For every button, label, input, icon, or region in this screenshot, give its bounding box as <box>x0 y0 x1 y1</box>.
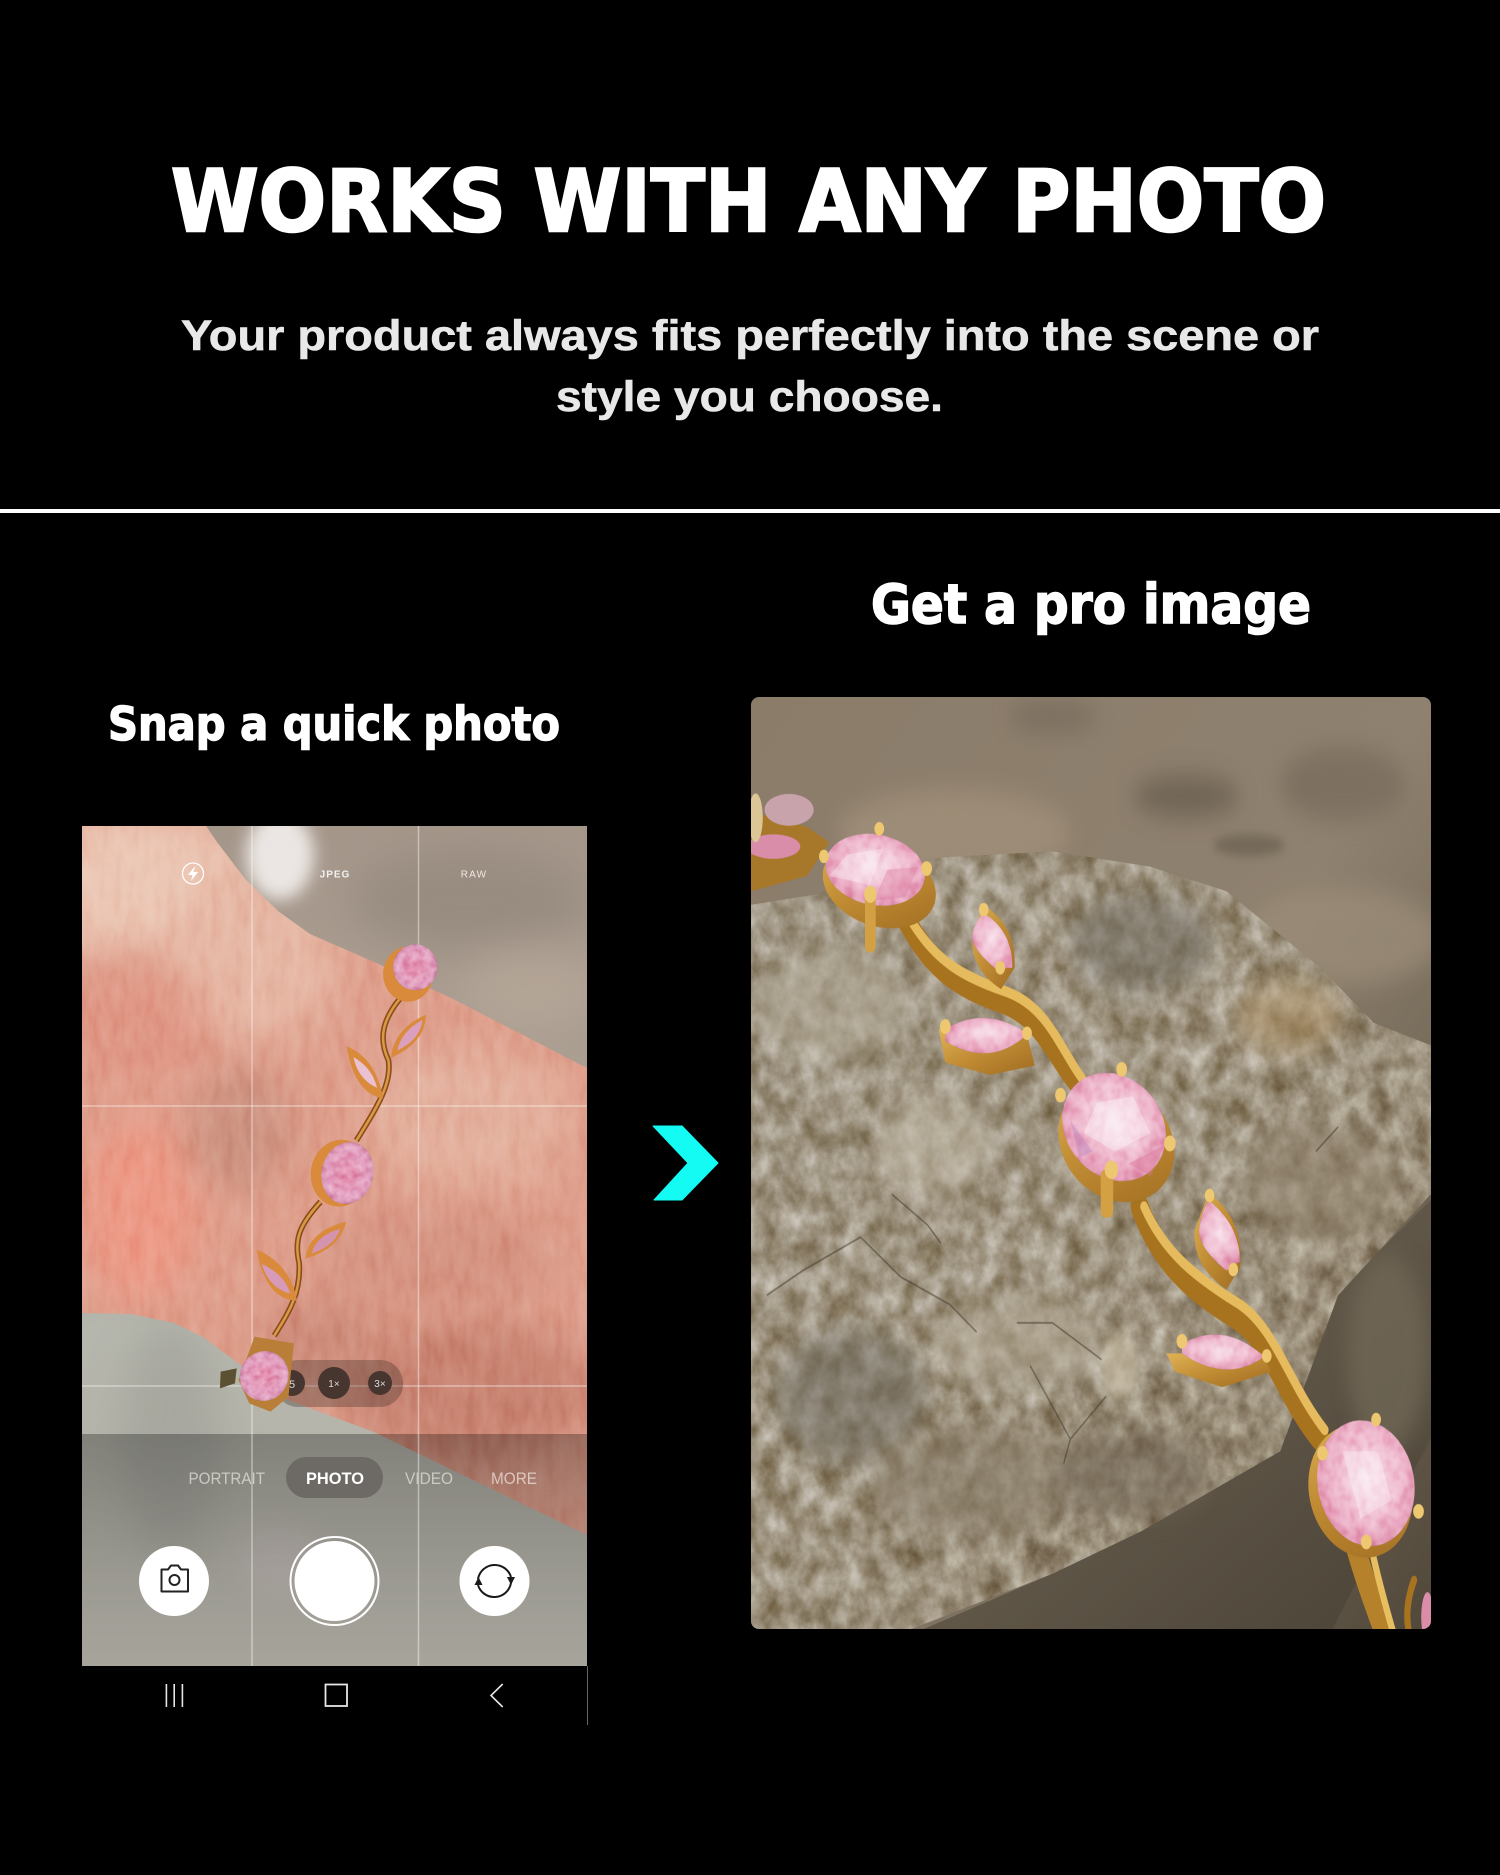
mode labels: MORE <box>491 1469 537 1488</box>
rock side face <box>910 1194 1436 1635</box>
rock cracks <box>767 1127 1338 1464</box>
bracelet on wrist <box>258 944 437 1336</box>
panel: phone camera photo <box>10 810 600 1666</box>
mode labels: PORTRAIT <box>188 1469 265 1488</box>
heading: get a pro image: Get a pro image <box>871 573 1311 636</box>
gem bottom right <box>1308 1412 1431 1629</box>
flip camera button icon <box>460 1546 530 1616</box>
shutter button <box>290 1537 378 1625</box>
subtitle: Your product always fits perfectly into the scene or <box>181 312 1319 360</box>
mode labels: PHOTO <box>306 1469 364 1488</box>
bracelet band <box>907 922 1414 1635</box>
rock top face <box>740 851 1436 1635</box>
zoom selector <box>275 1360 403 1407</box>
partial left stone <box>740 793 829 894</box>
mode labels <box>188 1457 537 1498</box>
bottom camera control band <box>82 1434 587 1666</box>
leaf stone 1 <box>972 903 1015 989</box>
zoom selector: 1× <box>328 1379 340 1390</box>
gem center <box>1055 1062 1176 1218</box>
leaf stone 2 <box>939 1018 1035 1075</box>
zoom selector: 5 <box>289 1379 295 1391</box>
title: WORKS WITH ANY PHOTO <box>171 152 1326 252</box>
mode labels: VIDEO <box>405 1469 453 1488</box>
grid lines <box>82 826 587 1666</box>
leaf stone 3 <box>1194 1189 1240 1289</box>
top camera labels <box>182 863 487 884</box>
zoom selector: 3× <box>374 1379 386 1390</box>
leaf stone 4 <box>1166 1334 1272 1387</box>
bottom stone and clasp <box>220 1337 294 1412</box>
gallery button icon <box>139 1546 209 1616</box>
subtitle: style you choose. <box>556 373 943 421</box>
arrow <box>653 1126 718 1200</box>
subtitle <box>181 312 1319 421</box>
top camera labels: RAW <box>461 870 487 880</box>
phone navigation bar <box>166 1666 588 1725</box>
heading: snap a quick photo: Snap a quick photo <box>108 697 560 751</box>
leaves <box>348 1049 381 1097</box>
gem top left <box>818 822 941 952</box>
rock tone patches <box>753 894 1396 1537</box>
stones <box>383 944 437 1002</box>
arm with skin tones <box>82 826 587 1535</box>
top camera labels: JPEG <box>320 870 350 880</box>
panel: pro photo on rock <box>740 680 1454 1660</box>
